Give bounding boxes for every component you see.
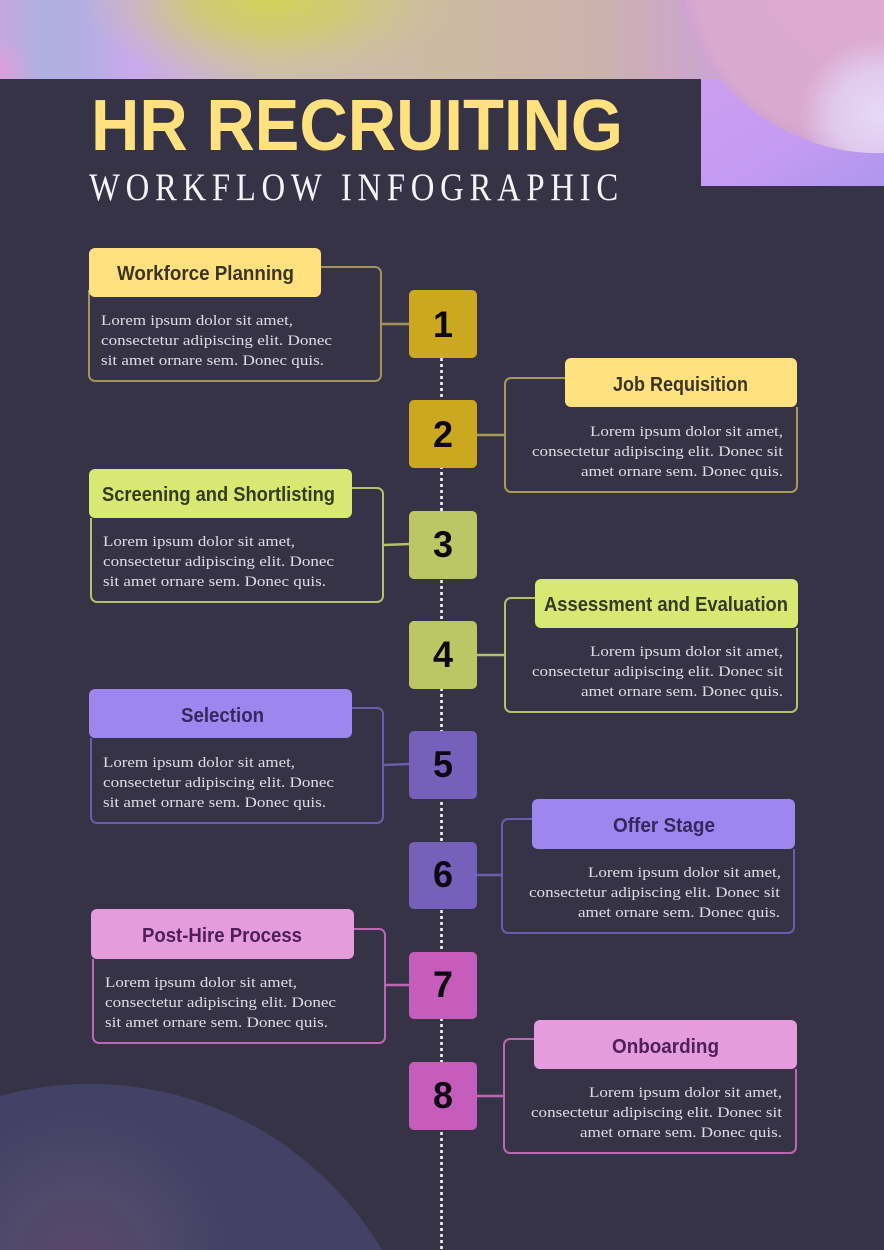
step 2: Job Requisition: Job Requisition [613,374,748,396]
step 8: Onboarding: Onboarding [612,1036,719,1058]
number badge 7 [409,952,477,1019]
step 4: Assessment and Evaluation: 4 [433,634,453,675]
body text: consectetur adipiscing elit. Donec sit [532,664,784,680]
body text: consectetur adipiscing elit. Donec sit [529,885,781,901]
number badge 5 [409,731,477,799]
heading: Screening and Shortlisting [89,469,352,518]
step 6: Offer Stage: Offer Stage [613,815,715,837]
heading: Assessment and Evaluation [535,579,798,628]
subtitle: WORKFLOW INFOGRAPHIC [89,165,618,209]
dotted timeline [440,358,443,1250]
step 7: Post-Hire Process: Post-Hire Process [142,925,302,947]
step 2: Job Requisition: 2 [433,414,453,455]
step 4: Assessment and Evaluation [409,579,798,712]
step 4: Assessment and Evaluation: Assessment and Evaluation [544,594,788,616]
number badge 1 [409,290,477,358]
step 7: Post-Hire Process [91,909,477,1043]
body text: amet ornare sem. Donec quis. [580,1125,782,1141]
step 6: Offer Stage: 6 [433,854,453,895]
body text: sit amet ornare sem. Donec quis. [105,1015,328,1031]
title: HR RECRUITING [91,86,623,166]
top-right gradient circle [680,0,884,153]
body text: amet ornare sem. Donec quis. [578,905,780,921]
body text: sit amet ornare sem. Donec quis. [103,795,326,811]
body text: Lorem ipsum dolor sit amet, [103,755,295,771]
number badge 8 [409,1062,477,1130]
heading: Offer Stage [532,799,795,849]
body text: Lorem ipsum dolor sit amet, [588,865,781,881]
step 6: Offer Stage [409,799,795,933]
top-right lavender panel [701,79,884,186]
body text: Lorem ipsum dolor sit amet, [103,534,295,550]
body text: Lorem ipsum dolor sit amet, [105,975,297,991]
body text: consectetur adipiscing elit. Donec sit [531,1105,783,1121]
body text: consectetur adipiscing elit. Donec [105,995,336,1011]
number badge 3 [409,511,477,579]
step 7: Post-Hire Process: 7 [433,964,453,1005]
step 8: Onboarding [409,1020,797,1153]
heading: Workforce Planning [89,248,321,297]
step 3: Screening and Shortlisting [89,469,477,602]
step 3: Screening and Shortlisting: Screening and Shortlisting [102,484,335,506]
number badge 2 [409,400,477,468]
top gradient band [0,0,884,79]
body text: consectetur adipiscing elit. Donec [103,554,334,570]
body text: consectetur adipiscing elit. Donec [101,333,332,349]
heading: Post-Hire Process [91,909,354,959]
step 1: Workforce Planning [89,248,477,381]
body text: consectetur adipiscing elit. Donec sit [532,444,784,460]
step 5: Selection [89,689,477,823]
heading: Selection [89,689,352,738]
body text: amet ornare sem. Donec quis. [581,684,783,700]
step 1: Workforce Planning: Workforce Planning [117,263,294,285]
heading: Onboarding [534,1020,797,1069]
heading: Job Requisition [565,358,797,407]
step 2: Job Requisition [409,358,797,492]
step 1: Workforce Planning: 1 [433,304,453,345]
step 5: Selection: 5 [433,744,453,785]
body text: amet ornare sem. Donec quis. [581,464,783,480]
body text: Lorem ipsum dolor sit amet, [590,424,783,440]
body text: sit amet ornare sem. Donec quis. [103,574,326,590]
body text: Lorem ipsum dolor sit amet, [590,644,783,660]
bottom-left gradient circle [0,1084,382,1250]
number badge 4 [409,621,477,689]
body text: sit amet ornare sem. Donec quis. [101,353,324,369]
body text: Lorem ipsum dolor sit amet, [589,1085,782,1101]
step 3: Screening and Shortlisting: 3 [433,524,453,565]
step 8: Onboarding: 8 [433,1075,453,1116]
body text: consectetur adipiscing elit. Donec [103,775,334,791]
step 5: Selection: Selection [181,705,264,727]
body text: Lorem ipsum dolor sit amet, [101,313,293,329]
number badge 6 [409,842,477,909]
